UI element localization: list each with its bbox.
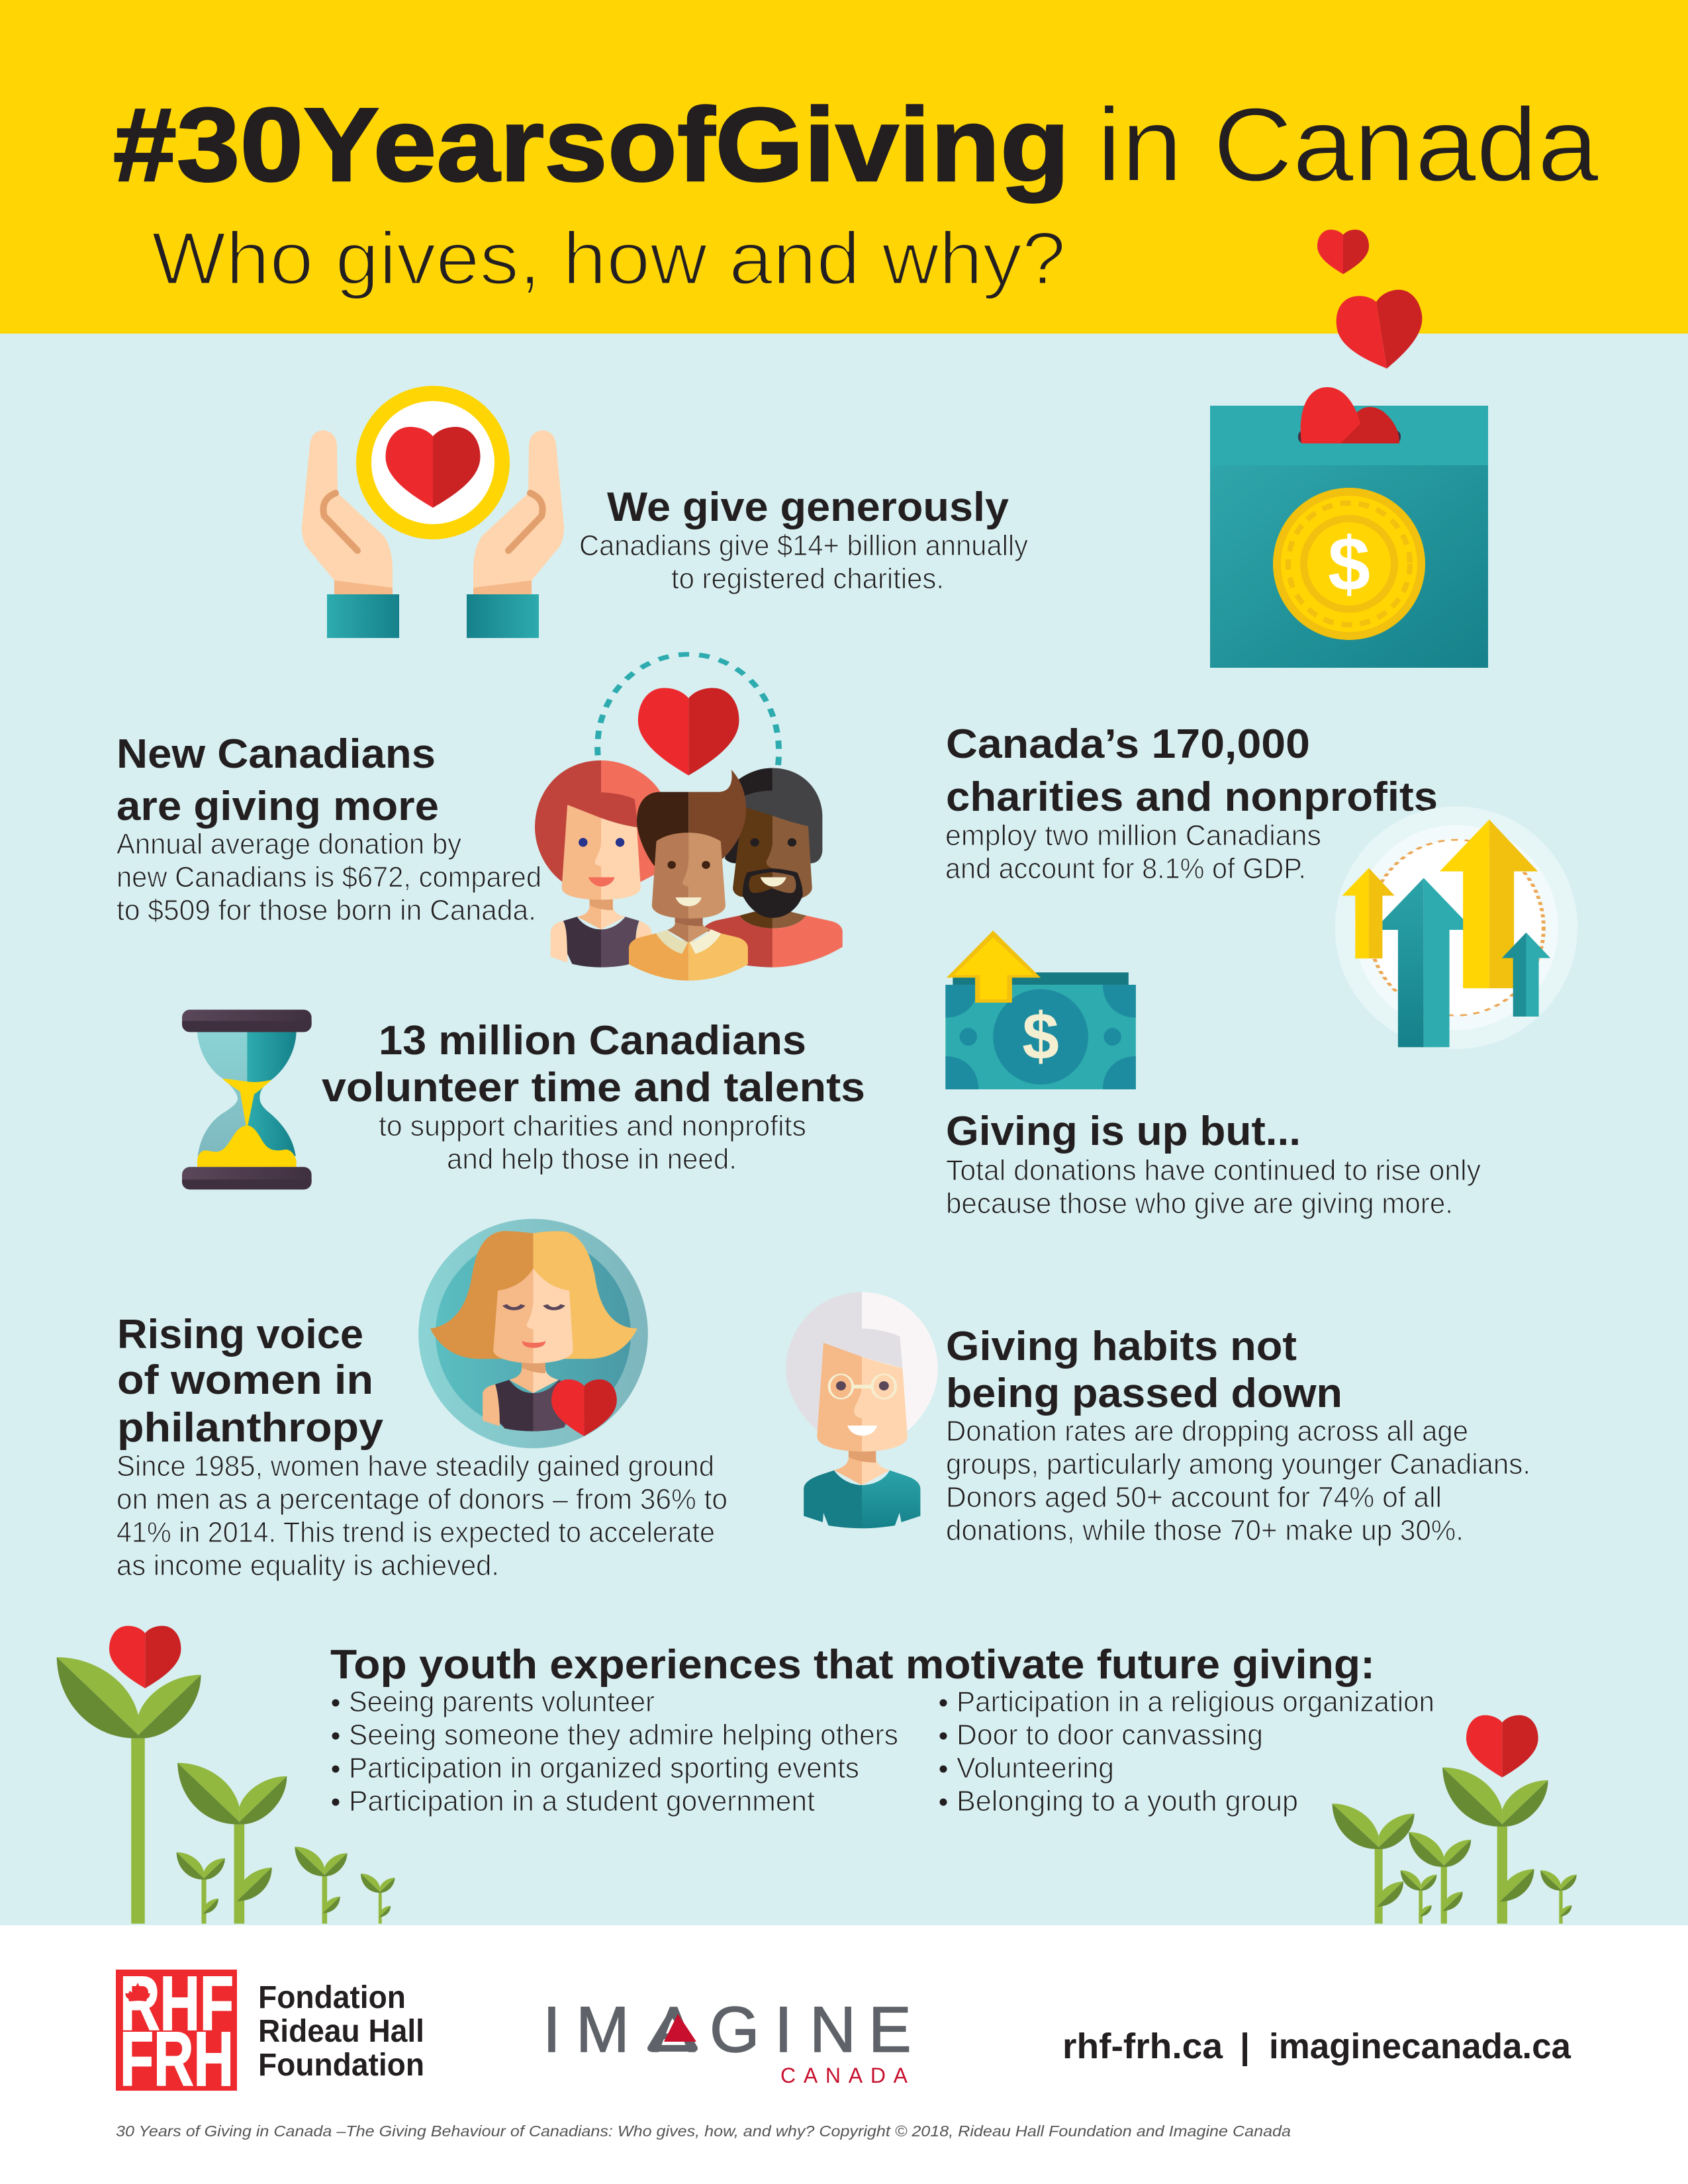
footer background	[0, 1925, 1688, 2184]
bullet list: left: Seeing someone they admire helping others	[349, 1719, 898, 1751]
text block: new Canadians	[117, 731, 541, 927]
website links: imaginecanada.ca	[1269, 2026, 1571, 2066]
text block: new Canadians: new Canadians is $672, compared	[117, 861, 541, 893]
heading: volunteer time and talents	[322, 1065, 865, 1111]
text block: volunteers	[322, 1018, 865, 1175]
text block: rising voice of women: on men as a percentage of donors – from 36% to	[117, 1483, 727, 1516]
heading	[946, 721, 1438, 820]
logo: Imagine Canada: IMAGINE	[543, 1993, 912, 2066]
icon: donation box with coin and falling hearts: $	[1328, 522, 1370, 607]
logo: Rideau Hall Foundation	[116, 1960, 424, 2102]
text block: rising voice of women: as income equality is achieved.	[117, 1549, 499, 1582]
heading	[322, 1018, 865, 1111]
text block: we give generously: to registered charities.	[671, 563, 944, 595]
text block: charities and nonprofits: and account for 8.1% of GDP.	[945, 852, 1306, 885]
icon: rising arrows	[1335, 806, 1577, 1049]
title: in Canada	[1097, 87, 1599, 203]
text block: giving habits: groups, particularly among younger Canadians.	[946, 1448, 1530, 1480]
icon: banknote with up arrow	[945, 931, 1136, 1089]
heading	[117, 731, 439, 829]
website links: rhf-frh.ca	[1062, 2026, 1223, 2066]
text block: volunteers: to support charities and nonprofits	[379, 1110, 806, 1142]
icon: hands holding heart	[302, 386, 564, 638]
title	[113, 87, 1599, 203]
heading: Top youth experiences that motivate future giving:	[330, 1642, 1375, 1688]
heading: are giving more	[117, 784, 439, 829]
heading: Giving is up but...	[946, 1109, 1301, 1154]
bullet list: right	[940, 1686, 1434, 1817]
text block: rising voice of women: Since 1985, women have steadily gained ground	[117, 1450, 714, 1482]
title: #30YearsofGiving	[113, 87, 1070, 203]
logo: Imagine Canada: CANADA	[780, 2064, 908, 2087]
heading: New Canadians	[117, 731, 436, 777]
bullet list: left: Seeing parents volunteer	[349, 1686, 655, 1718]
logo: Rideau Hall Foundation: FRH	[120, 2016, 234, 2102]
text block: charities and nonprofits	[945, 721, 1438, 885]
icon: left plants with heart	[57, 1626, 395, 1924]
text block: rising voice of women: 41% in 2014. This trend is expected to accelerate	[117, 1516, 715, 1549]
text block: new Canadians: to $509 for those born in Canada.	[117, 894, 536, 927]
text block: giving habits: donations, while those 70+ make up 30%.	[946, 1514, 1464, 1547]
heading: Canada’s 170,000	[946, 721, 1310, 767]
logo: Rideau Hall Foundation: Fondation	[258, 1980, 406, 2015]
heading: We give generously	[607, 484, 1009, 530]
text block: rising voice of women	[117, 1312, 727, 1582]
heading: charities and nonprofits	[946, 774, 1438, 820]
text block: giving habits: Donors aged 50+ account for 74% of all	[946, 1481, 1442, 1514]
heading: Giving habits not	[946, 1324, 1297, 1369]
text block: giving habits	[946, 1324, 1530, 1547]
heading: philanthropy	[117, 1405, 384, 1451]
bullet list: left: Participation in a student government	[349, 1785, 815, 1817]
icon: banknote with up arrow: $	[1022, 999, 1059, 1073]
icon: hourglass	[182, 1010, 312, 1189]
bullet list: right: Participation in a religious organization	[957, 1686, 1434, 1718]
text block: volunteers: and help those in need.	[447, 1143, 737, 1175]
text block: charities and nonprofits: employ two million Canadians	[945, 819, 1321, 852]
heading: of women in	[117, 1357, 373, 1403]
heading: 13 million Canadians	[379, 1018, 806, 1064]
text block: we give generously	[579, 484, 1028, 595]
header banner	[0, 0, 1688, 334]
logo: Rideau Hall Foundation: RHF	[120, 1960, 234, 2046]
text block: giving habits: Donation rates are dropping across all age	[946, 1415, 1468, 1447]
website links	[1062, 2026, 1571, 2067]
icon: donation box with coin and falling hearts	[1210, 230, 1488, 668]
text block: giving is up: Total donations have continued to rise only	[946, 1154, 1481, 1187]
logo: Rideau Hall Foundation: Foundation	[258, 2048, 424, 2083]
text block: top youth experiences	[330, 1642, 1434, 1817]
text block: giving is up: because those who give are giving more.	[946, 1187, 1453, 1220]
icon: right plants with heart	[1333, 1715, 1577, 1924]
heading	[117, 1312, 384, 1451]
subtitle: Who gives, how and why?	[152, 217, 1066, 300]
text block: we give generously: Canadians give $14+ billion annually	[579, 529, 1028, 562]
text block: giving is up	[946, 1109, 1481, 1220]
bullet list: left: Participation in organized sporting events	[349, 1752, 859, 1784]
website links: |	[1240, 2026, 1250, 2067]
bullet list: right: Door to door canvassing	[957, 1719, 1263, 1751]
copyright line: 30 Years of Giving in Canada –The Giving Behaviour of Canadians: Who gives, how, and why? Copyright © 2018, Rideau Hall Foundation and Imagine Canada	[116, 2122, 1291, 2140]
bullet list: left	[332, 1686, 898, 1817]
heading: Rising voice	[117, 1312, 363, 1357]
icon: older woman with glasses	[786, 1292, 938, 1528]
heading: being passed down	[946, 1371, 1342, 1416]
heading	[946, 1324, 1342, 1416]
text block: new Canadians: Annual average donation by	[117, 828, 461, 860]
icon: woman with heart in oval	[418, 1219, 648, 1448]
icon: three people with heart and dashed arc	[535, 655, 843, 981]
bullet list: right: Volunteering	[957, 1752, 1114, 1784]
logo: Rideau Hall Foundation: Rideau Hall	[258, 2014, 424, 2049]
bullet list: right: Belonging to a youth group	[957, 1785, 1298, 1817]
